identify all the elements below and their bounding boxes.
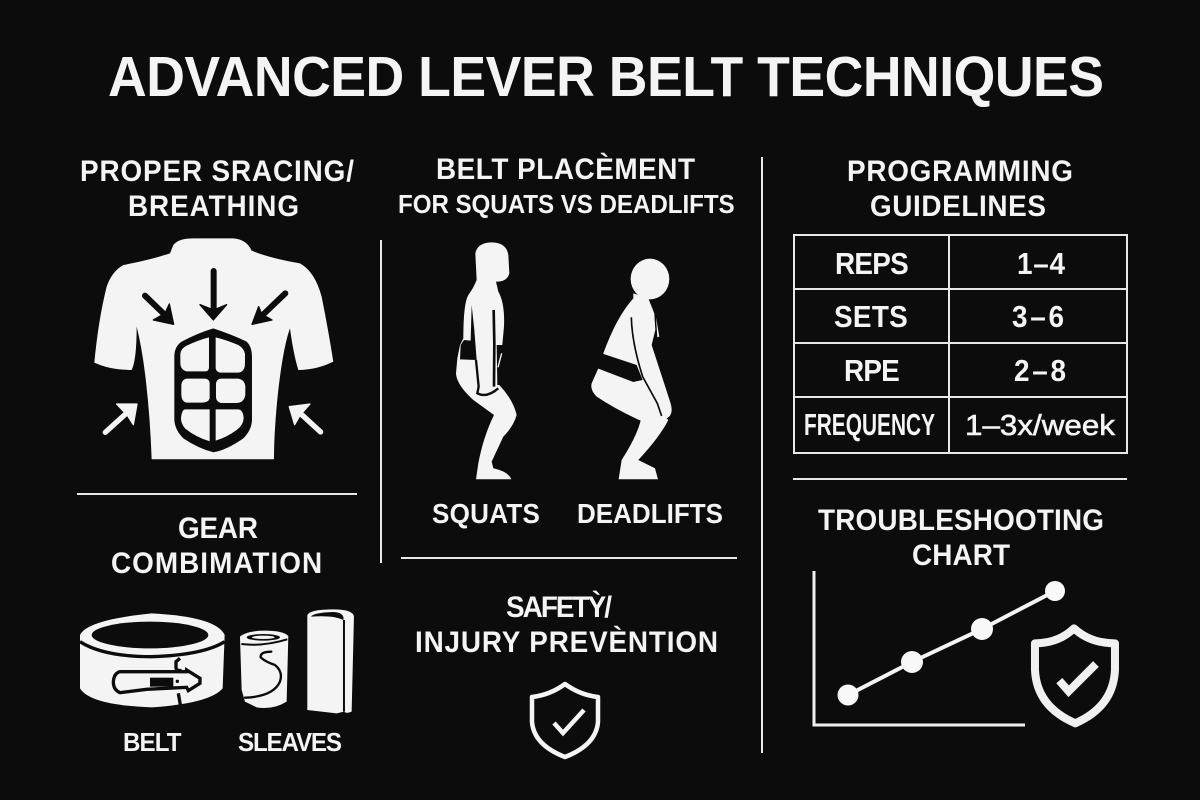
heading: gear combination: COMBIMATION — [111, 547, 322, 580]
table: REPS — [835, 247, 909, 281]
heading: gear combination: GEAR — [178, 512, 258, 545]
table: 2–8 — [1014, 354, 1066, 388]
abdominal plate — [174, 328, 252, 452]
label: squats: SQUATS — [432, 498, 540, 529]
divider — [761, 157, 763, 753]
heading: belt placement: BELT PLACÈMENT — [436, 151, 695, 186]
icon: squat figure — [456, 242, 517, 479]
table: 1–3x/week — [965, 410, 1116, 442]
icon: torso with arrows — [94, 238, 333, 459]
title: ADVANCED LEVER BELT TECHNIQUES — [108, 44, 1104, 108]
expansion arrows — [105, 410, 321, 432]
divider — [793, 478, 1127, 480]
heading: troubleshooting: TROUBLESHOOTING — [818, 504, 1104, 537]
table: FREQUENCY — [804, 407, 935, 442]
icon: sleeve roll — [240, 631, 288, 708]
heading: proper bracing — [80, 155, 354, 223]
heading: safety: SAFETỲ/ — [506, 589, 612, 624]
divider — [77, 493, 357, 495]
heading: belt placement: FOR SQUATS VS DEADLIFTS — [398, 190, 735, 219]
panel: bracing and breathing — [80, 155, 354, 459]
label: belt: BELT — [123, 728, 182, 757]
heading: programming guidelines: PROGRAMMING — [847, 155, 1073, 188]
panel: troubleshooting chart — [814, 504, 1115, 725]
icon: tall sleeve — [307, 609, 354, 713]
line chart — [814, 571, 1065, 725]
compression arrows — [145, 271, 285, 317]
panel: gear combination — [80, 512, 354, 757]
heading: gear combination — [111, 512, 322, 580]
heading: belt placement — [398, 151, 735, 219]
heading: programming guidelines: GUIDELINES — [870, 190, 1046, 223]
table: 3–6 — [1012, 300, 1064, 334]
table — [794, 235, 1127, 453]
heading: proper bracing: BREATHING — [128, 190, 299, 223]
divider — [380, 240, 382, 563]
heading: safety: INJURY PREVÈNTION — [415, 624, 718, 659]
table: 1–4 — [1017, 247, 1066, 281]
icon: deadlift figure — [591, 259, 672, 479]
heading: safety — [415, 589, 718, 659]
panel: belt placement — [398, 151, 735, 529]
table: RPE — [844, 354, 900, 388]
heading: programming guidelines — [847, 155, 1073, 223]
panel: safety — [415, 589, 718, 757]
icon: large shield — [1035, 628, 1115, 723]
label: deadlifts: DEADLIFTS — [577, 498, 723, 529]
label: sleeves: SLEAVES — [238, 728, 342, 757]
heading: troubleshooting: CHART — [912, 539, 1010, 572]
icon: belt — [80, 613, 225, 707]
icon: small shield — [532, 684, 598, 757]
table: SETS — [834, 300, 908, 334]
heading: troubleshooting — [818, 504, 1104, 572]
divider — [401, 557, 737, 559]
panel: programming guidelines — [794, 155, 1127, 453]
heading: proper bracing: PROPER SRACING/ — [80, 155, 354, 188]
